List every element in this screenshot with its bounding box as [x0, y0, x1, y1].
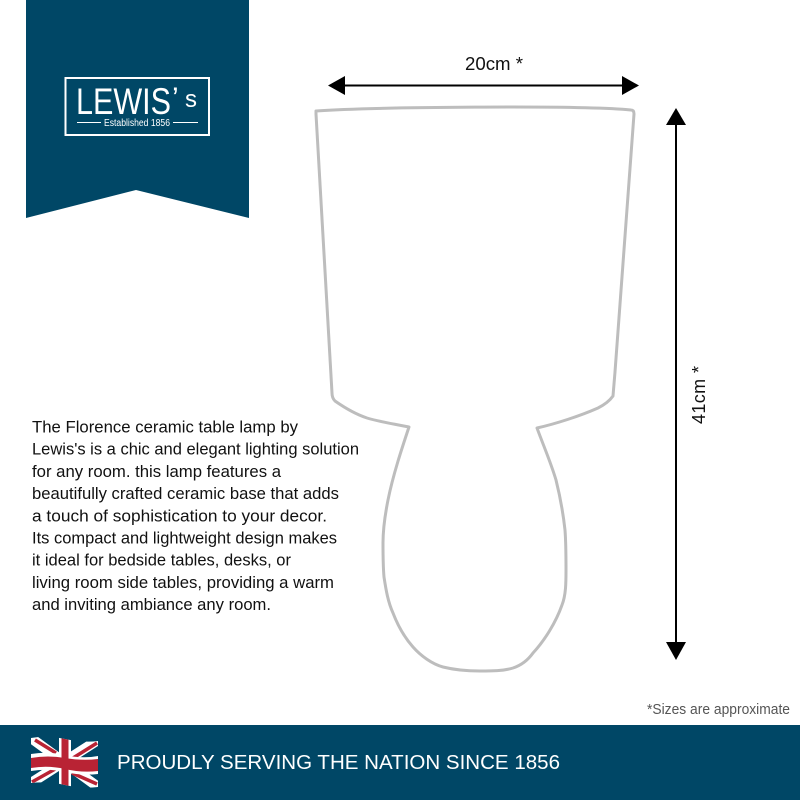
banner with logo	[26, 0, 249, 218]
logo: ’	[172, 82, 179, 115]
footer bar	[0, 725, 800, 800]
description text: beautifully crafted ceramic base that adds	[32, 484, 339, 503]
width label: 20cm *	[465, 54, 523, 74]
approximate sizes note: *Sizes are approximate	[647, 701, 790, 718]
description text: it ideal for bedside tables, desks, or	[32, 550, 291, 570]
width arrow	[328, 76, 639, 95]
icon: union jack flag	[31, 734, 98, 790]
description text: for any room. this lamp features a	[32, 462, 282, 481]
description text: a touch of sophistication to your decor.	[32, 506, 327, 526]
lamp outline	[316, 107, 634, 671]
logo: Established 1856	[104, 118, 170, 129]
logo	[66, 78, 209, 135]
description text	[32, 418, 359, 614]
description text: The Florence ceramic table lamp by	[32, 418, 298, 436]
logo: LEWIS	[76, 81, 171, 122]
height label: 41cm *	[689, 366, 709, 424]
logo: s	[185, 86, 197, 113]
height arrow	[666, 108, 686, 660]
description text: Its compact and lightweight design makes	[32, 528, 337, 548]
footer slogan: PROUDLY SERVING THE NATION SINCE 1856	[117, 751, 560, 774]
description text: living room side tables, providing a warm	[32, 573, 334, 592]
description text: and inviting ambiance any room.	[32, 595, 271, 614]
description text: Lewis's is a chic and elegant lighting solution	[32, 440, 359, 458]
